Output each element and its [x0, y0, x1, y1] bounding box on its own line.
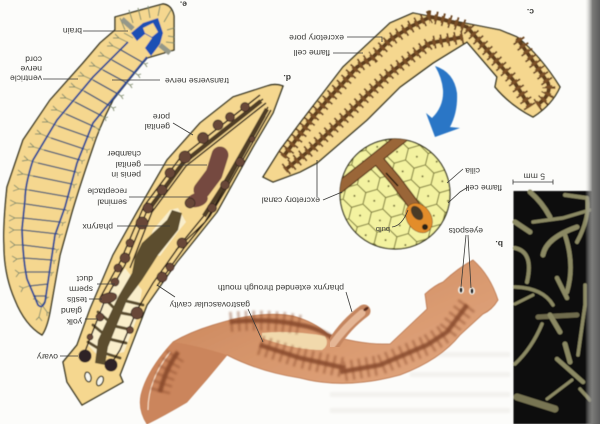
beads along canals [283, 17, 549, 170]
ladder cells [88, 268, 142, 358]
body outline e [4, 4, 174, 335]
cream pouches around pharynx [145, 208, 186, 256]
bulb [404, 202, 434, 234]
label: b.: b. [495, 239, 503, 249]
label: yolk gland [61, 306, 98, 327]
pharynx and gut [95, 210, 182, 365]
label: ventricle nerve cord: nerve [20, 64, 42, 74]
label: pharynx extended through mouth [218, 283, 352, 312]
label: excretory canal: excretory canal [262, 196, 320, 206]
head sensory lines [120, 6, 174, 43]
cream patch [262, 332, 327, 350]
label: bulb [376, 210, 408, 234]
inset circle: flame cell [336, 136, 450, 249]
label: sperm duct: duct [76, 274, 93, 284]
label: genital pore [145, 112, 193, 135]
label: gastrovascular cavity: gastrovascular cavity [169, 300, 250, 310]
label: seminal receptacle: receptacle [87, 186, 127, 196]
label: yolk gland: yolk [66, 317, 82, 327]
label: flame cell inset: flame cell [466, 183, 502, 193]
label: brain: brain [63, 26, 82, 36]
label: scale bar 5 mm: 5 mm [524, 172, 545, 182]
long nerve and gut bundles [84, 95, 271, 364]
tail lobe shading [140, 342, 227, 424]
body outline d [63, 84, 283, 405]
flame cell spines [283, 17, 549, 170]
auricle nerve patches [122, 19, 170, 53]
label: penis in genital chamber: penis in [111, 170, 141, 180]
page edge shadow [585, 0, 600, 424]
label: ovary: ovary [36, 352, 58, 362]
label: penis in genital chamber: genital [116, 160, 141, 170]
label: seminal receptacle: seminal [97, 198, 127, 208]
label: genital pore: genital [145, 122, 170, 132]
eyespots b [458, 286, 475, 295]
label: cilia: cilia [465, 166, 480, 176]
label: eyespots: eyespots [449, 226, 483, 236]
brain [131, 18, 163, 56]
body b [140, 260, 498, 424]
label: flame cell inset [448, 183, 502, 203]
label: flame cell upper [294, 48, 363, 58]
extended pharynx [332, 306, 369, 345]
penis and seminal receptacle [202, 155, 220, 190]
digestive stripe [160, 305, 467, 392]
feathered gut branches [160, 305, 467, 392]
label: penis in genital chamber: chamber [107, 149, 141, 159]
canal [336, 136, 416, 208]
label: seminal receptacle [87, 186, 190, 208]
worm b: external view [140, 260, 498, 424]
label: ventricle nerve cord: cord [25, 54, 42, 64]
blue arrow [426, 66, 460, 137]
label: pharynx [82, 222, 170, 232]
ovaries [78, 350, 118, 372]
excretory canals [283, 17, 549, 170]
label: testis [67, 295, 102, 305]
label: ovary [36, 352, 78, 362]
label: pharynx extended through mouth: pharynx extended through mouth [218, 283, 344, 293]
label: excretory pore: excretory pore [289, 33, 344, 43]
label: transverse nerve [112, 76, 229, 86]
label: brain [63, 26, 128, 36]
worm e: nervous system [4, 4, 174, 335]
worm c: excretory system [263, 13, 560, 182]
label: cilia [447, 166, 480, 183]
faint show-through text [330, 352, 510, 413]
label: d.: d. [283, 73, 291, 83]
ventral nerve cords [22, 42, 147, 306]
label: genital pore: pore [153, 112, 170, 122]
label: c.: c. [527, 7, 534, 17]
label: sperm duct [69, 274, 115, 294]
label: penis in genital chamber [107, 149, 207, 180]
label: excretory pore [289, 33, 382, 43]
label: excretory canal [262, 160, 342, 206]
label: ventricle nerve cord: ventricle [10, 74, 42, 84]
label: yolk gland: gland [61, 306, 82, 316]
photo: planarians on black [514, 191, 592, 424]
label: flame cell upper: flame cell [294, 48, 330, 58]
worm d: digestive and reproductive systems [63, 84, 283, 405]
label: gastrovascular cavity [157, 285, 263, 342]
label: testis: testis [67, 295, 87, 305]
transverse nerves [22, 50, 142, 296]
vitelline glands [87, 102, 255, 340]
label: eyespots [449, 226, 483, 288]
label: bulb: bulb [376, 225, 390, 234]
label: pharynx: pharynx [82, 222, 113, 232]
eyes d [84, 371, 105, 387]
label: scale bar 5 mm [513, 172, 553, 184]
label: ventricle nerve cord [10, 54, 78, 84]
nerve twigs [9, 34, 148, 321]
body outline c [263, 13, 560, 182]
gut ladder rungs [88, 298, 143, 358]
label: transverse nerve: transverse nerve [165, 76, 229, 86]
label: sperm duct: sperm [69, 284, 93, 294]
labels [10, 0, 553, 362]
